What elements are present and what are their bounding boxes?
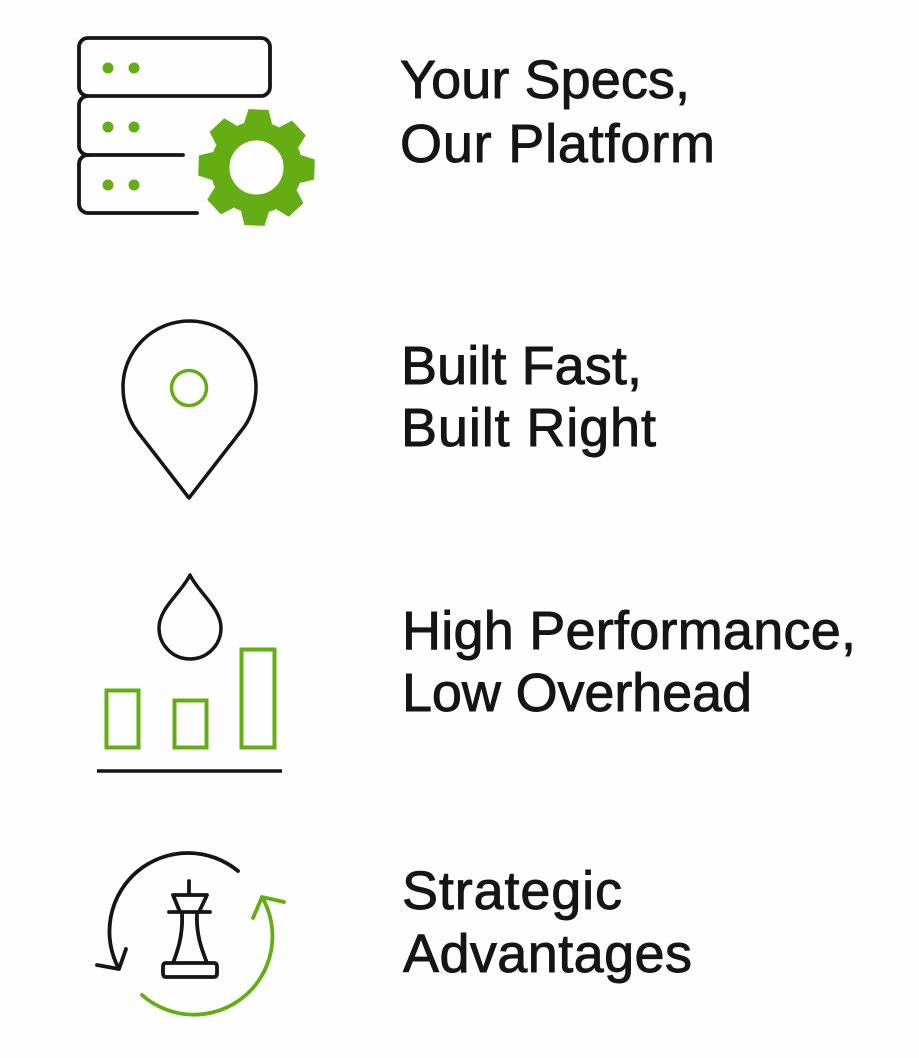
icon: server stack with gear	[79, 38, 315, 226]
heading: Your Specs, Our Platform: Our Platform	[400, 114, 715, 174]
heading: Built Fast, Built Right: Built Fast,	[401, 336, 642, 396]
icon: chess king with cycle arrows	[97, 853, 284, 1015]
icon: location pin	[123, 321, 256, 498]
heading: High Performance, Low Overhead: High Performance,	[402, 601, 856, 661]
heading: Strategic Advantages: Strategic	[402, 861, 622, 921]
heading: Built Fast, Built Right: Built Right	[401, 398, 656, 458]
heading: Strategic Advantages: Advantages	[403, 924, 692, 984]
heading: Your Specs, Our Platform: Your Specs,	[400, 50, 690, 110]
icon: droplet above bar chart	[97, 575, 282, 771]
heading: High Performance, Low Overhead: Low Overhead	[402, 663, 752, 723]
